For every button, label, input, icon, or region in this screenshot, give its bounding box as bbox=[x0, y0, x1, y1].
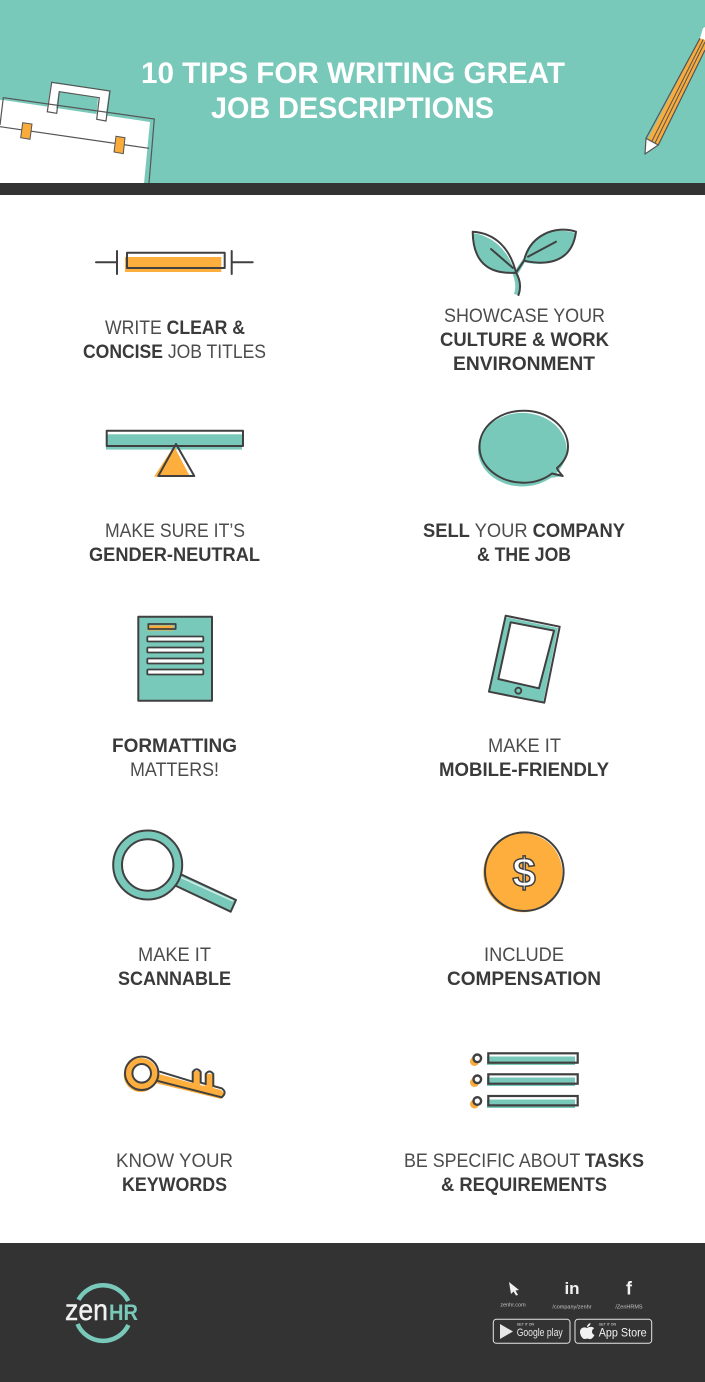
title: JOB DESCRIPTIONS bbox=[211, 92, 494, 125]
icon: speech bubble bbox=[478, 411, 568, 487]
icon: website cursor bbox=[509, 1282, 519, 1296]
title bbox=[141, 57, 565, 125]
icon: document bbox=[138, 617, 212, 702]
icon: linkedin: in bbox=[564, 1279, 580, 1298]
tip text: & THE JOB bbox=[477, 544, 571, 566]
icon: title width bar bbox=[96, 251, 253, 274]
link labels: /ZenHRMS bbox=[615, 1305, 643, 1311]
tip 3: gender-neutral bbox=[89, 431, 260, 566]
tip 9: keywords bbox=[116, 1057, 233, 1196]
tip 4: sell company and job bbox=[423, 411, 625, 566]
tip text: SHOWCASE YOUR bbox=[444, 305, 605, 327]
tip text: MAKE IT bbox=[138, 944, 211, 966]
logo: ZenHR: HR bbox=[109, 1300, 138, 1325]
tip text bbox=[404, 1150, 644, 1196]
footer panel bbox=[0, 1243, 705, 1382]
tip text: INCLUDE bbox=[484, 944, 564, 966]
tip 7: scannable bbox=[113, 830, 236, 990]
tip text: KNOW YOUR bbox=[116, 1150, 233, 1172]
icon: sprout bbox=[472, 230, 576, 295]
badge: App Store: App Store bbox=[599, 1326, 647, 1340]
icon: magnifying glass bbox=[113, 830, 236, 912]
tip text bbox=[440, 305, 609, 375]
tip text bbox=[89, 520, 260, 566]
icon: facebook: f bbox=[626, 1278, 633, 1298]
tip text: SELL YOUR COMPANY bbox=[423, 520, 625, 542]
tip text: MOBILE-FRIENDLY bbox=[439, 759, 609, 781]
logo: ZenHR: zen bbox=[65, 1294, 108, 1327]
tip text bbox=[118, 944, 231, 990]
tip 10: specific tasks bbox=[404, 1053, 644, 1196]
tip 1: clear and concise titles bbox=[83, 251, 266, 363]
tip text: SCANNABLE bbox=[118, 968, 231, 990]
tip text: WRITE CLEAR & bbox=[105, 317, 245, 339]
link labels bbox=[500, 1302, 643, 1311]
tip text bbox=[83, 317, 266, 363]
tip text: MAKE IT bbox=[488, 735, 561, 757]
badge: Google Play: Google play bbox=[517, 1327, 563, 1339]
tip 6: mobile-friendly bbox=[439, 616, 609, 781]
icon: dollar coin: $ bbox=[512, 849, 536, 896]
logo: ZenHR bbox=[65, 1285, 138, 1341]
tip text: CONCISE JOB TITLES bbox=[83, 341, 266, 363]
tip text bbox=[112, 735, 237, 781]
tip 8: compensation bbox=[447, 832, 601, 990]
tip 2: showcase culture bbox=[440, 230, 609, 375]
badge: Google Play: GET IT ON bbox=[517, 1322, 535, 1326]
icon: tablet bbox=[488, 616, 560, 703]
badge: App Store: GET IT ON bbox=[599, 1322, 617, 1326]
tip text: KEYWORDS bbox=[122, 1174, 227, 1196]
tip text: & REQUIREMENTS bbox=[441, 1174, 607, 1196]
tip 5: formatting matters bbox=[112, 617, 237, 781]
tip text: COMPENSATION bbox=[447, 968, 601, 990]
tip text bbox=[116, 1150, 233, 1196]
icon: dollar coin bbox=[483, 832, 564, 912]
tip text: CULTURE & WORK bbox=[440, 329, 609, 351]
badge: Google Play bbox=[493, 1319, 570, 1343]
tip text: ENVIRONMENT bbox=[453, 353, 595, 375]
tip text: MATTERS! bbox=[130, 759, 219, 781]
icon: seesaw bbox=[106, 431, 243, 477]
icon: checklist bbox=[470, 1053, 578, 1108]
title: 10 TIPS FOR WRITING GREAT bbox=[141, 57, 565, 90]
tip text: MAKE SURE IT’S bbox=[105, 520, 245, 542]
tip text bbox=[423, 520, 625, 566]
icon: briefcase bbox=[0, 82, 154, 183]
icon: pencil bbox=[645, 27, 705, 154]
tip text bbox=[447, 944, 601, 990]
tip text bbox=[439, 735, 609, 781]
tip text: GENDER-NEUTRAL bbox=[89, 544, 260, 566]
link labels: /company/zenhr bbox=[552, 1305, 592, 1311]
social links bbox=[500, 1278, 643, 1311]
header banner bbox=[0, 0, 705, 195]
icon: key bbox=[124, 1057, 225, 1099]
badge: App Store bbox=[575, 1319, 652, 1343]
link labels: zenhr.com bbox=[500, 1302, 526, 1308]
tip text: FORMATTING bbox=[112, 735, 237, 757]
tip text: BE SPECIFIC ABOUT TASKS bbox=[404, 1150, 644, 1172]
